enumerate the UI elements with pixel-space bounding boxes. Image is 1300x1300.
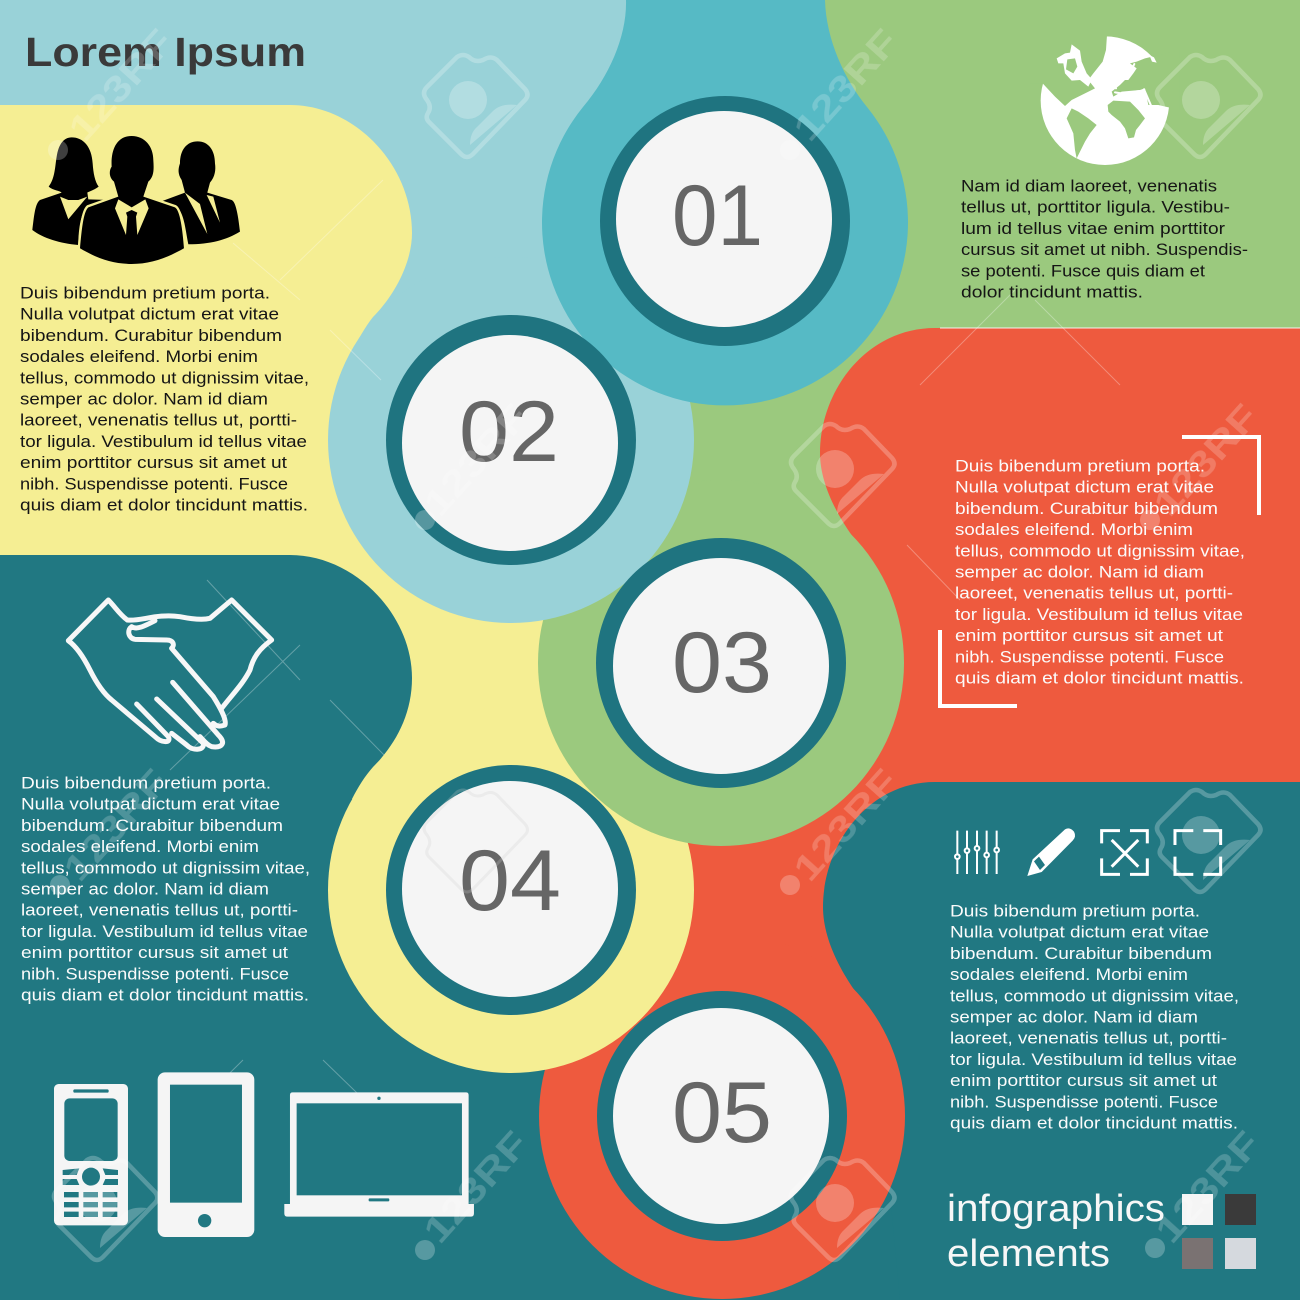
text block: yellow panel: Nulla volutpat dictum erat vitae — [20, 305, 279, 324]
text block: yellow panel: quis diam et dolor tincidunt mattis. — [20, 496, 308, 514]
text block: yellow panel: tellus, commodo ut dignissim vitae, — [20, 368, 309, 387]
text block: teal left panel: tellus, commodo ut dignissim vitae, — [21, 858, 310, 877]
blob: yellow circle 04 — [328, 707, 694, 1073]
text block: teal right panel: Duis bibendum pretium porta. — [950, 902, 1200, 920]
text block: teal left panel: sodales eleifend. Morbi enim — [21, 837, 259, 856]
text block: teal right panel: tor ligula. Vestibulum id tellus vitae — [950, 1050, 1237, 1069]
icon: frame corners — [1175, 831, 1221, 874]
panel: green top right — [600, 0, 1300, 640]
text block: red panel: tor ligula. Vestibulum id tellus vitae — [955, 605, 1243, 624]
text block: red panel: Duis bibendum pretium porta. — [955, 456, 1205, 476]
text block: teal right panel: bibendum. Curabitur bibendum — [950, 944, 1212, 963]
text block: teal left panel: Duis bibendum pretium porta. — [21, 774, 271, 792]
icon: laptop — [284, 1092, 474, 1217]
stock watermarks: 123RF — [55, 761, 176, 889]
text block: teal right panel: nibh. Suspendisse potenti. Fusce — [950, 1092, 1218, 1111]
caption: infographics elements: infographics — [947, 1188, 1165, 1230]
title: Lorem Ipsum — [25, 29, 306, 75]
text block: yellow panel: bibendum. Curabitur bibendum — [20, 326, 282, 345]
text block: teal right panel: semper ac dolor. Nam id diam — [950, 1008, 1198, 1026]
icon: corner bracket top right — [1182, 437, 1259, 515]
number badge 02 — [386, 315, 636, 565]
text block: teal left panel: semper ac dolor. Nam id diam — [21, 880, 269, 898]
legend swatches — [1182, 1194, 1256, 1269]
blob: light blue circle 02 — [328, 257, 694, 623]
text block: red panel: bibendum. Curabitur bibendum — [955, 499, 1218, 518]
stock watermarks: 123RF — [785, 761, 906, 889]
stock watermarks: 123RF — [415, 396, 536, 524]
text block: red panel: sodales eleifend. Morbi enim — [955, 520, 1193, 539]
icon: smartphone — [158, 1072, 254, 1237]
text block: teal left panel: enim porttitor cursus sit amet ut — [21, 943, 288, 962]
text block: red panel: Nulla volutpat dictum erat vitae — [955, 478, 1214, 497]
text block: teal left panel: quis diam et dolor tincidunt mattis. — [21, 986, 309, 1004]
stock watermarks: 123RF — [785, 21, 906, 149]
text block: teal right panel: Nulla volutpat dictum erat vitae — [950, 923, 1209, 942]
text block: green panel: tellus ut, porttitor ligula. Vestibu- — [961, 198, 1230, 217]
caption: infographics elements: elements — [947, 1233, 1110, 1275]
text block: red panel: quis diam et dolor tincidunt mattis. — [955, 668, 1244, 688]
text block: red panel: nibh. Suspendisse potenti. Fusce — [955, 647, 1224, 666]
text block: teal right panel: laoreet, venenatis tellus ut, portti- — [950, 1029, 1227, 1048]
number badge 04 — [386, 765, 636, 1015]
text block: red panel — [955, 456, 1245, 688]
text block: teal right panel — [950, 902, 1239, 1132]
number badge 03 — [596, 538, 846, 788]
caption: infographics elements — [947, 1188, 1165, 1275]
number badge 01 — [600, 96, 850, 346]
text block: green panel: Nam id diam laoreet, venenatis — [961, 176, 1217, 196]
number badge 02: 02 — [459, 384, 559, 480]
icon row: tools — [955, 828, 1221, 876]
blob: red circle 05 — [539, 933, 905, 1299]
text block: yellow panel — [20, 284, 309, 514]
stock watermarks: 123RF — [1147, 1123, 1268, 1251]
icon: globe — [1030, 30, 1180, 165]
text block: teal left panel: nibh. Suspendisse potenti. Fusce — [21, 964, 289, 983]
text block: yellow panel: semper ac dolor. Nam id diam — [20, 390, 268, 408]
panel: teal lower right — [823, 782, 1300, 1300]
number badge 03: 03 — [672, 615, 772, 711]
text block: teal right panel: enim porttitor cursus sit amet ut — [950, 1071, 1217, 1090]
text block: yellow panel: laoreet, venenatis tellus ut, portti- — [20, 411, 297, 430]
icon: expand with cross — [1102, 831, 1147, 874]
number badge 05: 05 — [672, 1065, 772, 1161]
stock watermarks: 123RF — [1145, 396, 1266, 524]
blob: green circle 03 — [538, 480, 904, 846]
text block: teal right panel: sodales eleifend. Morbi enim — [950, 965, 1188, 984]
text block: yellow panel: nibh. Suspendisse potenti. Fusce — [20, 474, 288, 493]
text block: teal left panel: laoreet, venenatis tellus ut, portti- — [21, 901, 298, 920]
stock watermarks: 123RF — [415, 1123, 536, 1251]
blob: blue circle 01 with neck — [542, 0, 908, 405]
text block: yellow panel: enim porttitor cursus sit amet ut — [20, 453, 287, 472]
number badge 01: 01 — [672, 168, 763, 264]
text block: red panel: enim porttitor cursus sit amet ut — [955, 626, 1223, 645]
icon: feature phone — [54, 1084, 128, 1225]
icon: pencil — [1027, 828, 1075, 876]
text block: yellow panel: sodales eleifend. Morbi enim — [20, 347, 258, 366]
stock watermarks: 123RF — [60, 21, 181, 149]
text block: teal left panel: bibendum. Curabitur bibendum — [21, 816, 283, 835]
number badge 04: 04 — [459, 833, 561, 929]
text block: green panel: cursus sit amet ut nibh. Suspendis- — [961, 240, 1248, 259]
text block: yellow panel: tor ligula. Vestibulum id tellus vitae — [20, 432, 307, 451]
panel: light blue top — [0, 0, 640, 400]
panel: red right — [620, 328, 1300, 1116]
text block: teal left panel: Nulla volutpat dictum erat vitae — [21, 795, 280, 814]
text block: green panel: se potenti. Fusce quis diam et — [961, 261, 1205, 280]
icon: sliders — [955, 831, 999, 874]
text block: teal right panel: quis diam et dolor tincidunt mattis. — [950, 1114, 1238, 1132]
text block: green panel: lum id tellus vitae enim porttitor — [961, 219, 1225, 238]
panel: teal lower left — [0, 555, 430, 1300]
number badge 05 — [597, 991, 847, 1241]
text block: teal right panel: tellus, commodo ut dignissim vitae, — [950, 986, 1239, 1005]
text block: green panel: dolor tincidunt mattis. — [961, 282, 1143, 302]
icon: handshake — [68, 600, 272, 749]
text block: green panel — [961, 176, 1248, 302]
panel: yellow left — [0, 105, 600, 890]
text block: teal left panel: tor ligula. Vestibulum id tellus vitae — [21, 922, 308, 941]
text block: red panel: laoreet, venenatis tellus ut, portti- — [955, 584, 1233, 603]
icon: business people — [32, 136, 240, 264]
text block: red panel: tellus, commodo ut dignissim vitae, — [955, 541, 1245, 560]
icon: corner bracket bottom left — [940, 630, 1017, 706]
text block: yellow panel: Duis bibendum pretium porta. — [20, 284, 270, 302]
text block: red panel: semper ac dolor. Nam id diam — [955, 562, 1204, 582]
text block: teal left panel — [21, 774, 310, 1004]
